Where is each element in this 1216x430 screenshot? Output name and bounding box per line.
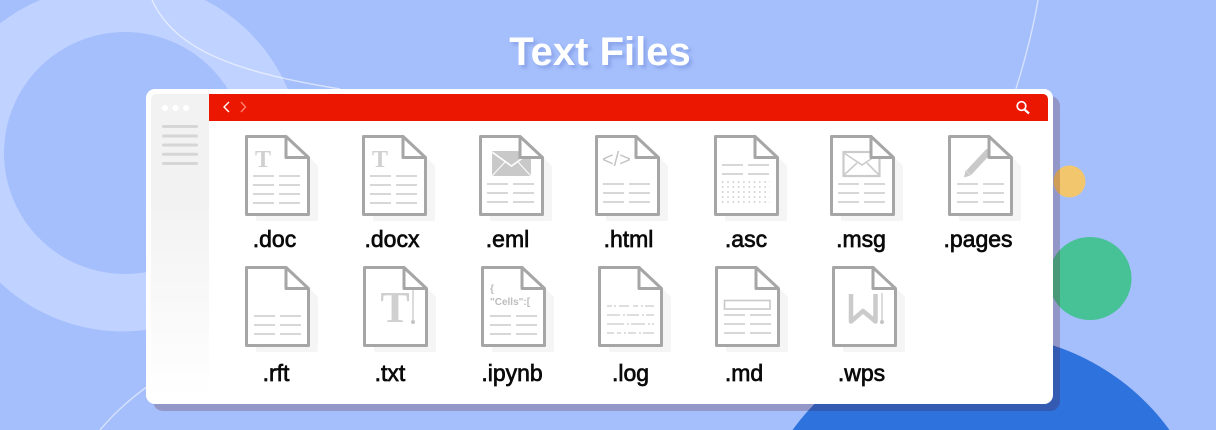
file: .doc: T: [255, 147, 271, 173]
file: .txt: T: [380, 283, 410, 332]
file: .pages: .pages: [943, 226, 1013, 252]
panel shadow: [153, 96, 1060, 411]
file: .eml: .eml: [486, 226, 529, 252]
file: .msg: [832, 136, 903, 252]
file: .html: [596, 136, 668, 252]
file: .ipynb: .ipynb: [481, 360, 543, 386]
file: .html: </>: [602, 149, 631, 171]
icon: search: [1017, 102, 1029, 114]
icon: forward arrow: [241, 102, 246, 112]
decorative yellow circle: [1054, 166, 1086, 198]
icon: back arrow: [224, 102, 229, 112]
file: .rft: .rft: [263, 360, 290, 386]
file: .ipynb: {: [490, 284, 494, 295]
file: .pages: [943, 136, 1021, 252]
file: .md: .md: [725, 360, 763, 386]
file: .docx: .docx: [365, 226, 420, 252]
file: .md: [716, 268, 788, 386]
file: .ipynb: "Cells":[: [490, 297, 531, 308]
title: Text Files: [509, 30, 691, 74]
file: .eml: [480, 136, 552, 252]
file: .docx: [364, 136, 435, 252]
panel: browser window: [146, 89, 1060, 411]
file: .asc: .asc: [725, 226, 767, 252]
decorative curved lines: [100, 0, 1038, 430]
file: .doc: .doc: [253, 226, 296, 252]
decorative large light circle: [0, 0, 302, 331]
file: .doc: [246, 136, 318, 252]
file: .msg: .msg: [836, 226, 886, 252]
file: .docx: T: [372, 147, 388, 173]
sidebar: [151, 94, 209, 399]
file: .txt: .txt: [375, 360, 406, 386]
file: .wps: [834, 268, 905, 386]
file: .wps: .wps: [838, 360, 885, 386]
file: .log: [600, 268, 671, 386]
decorative green circle: [1048, 237, 1132, 320]
file: .log: .log: [612, 360, 649, 386]
panel body: [146, 89, 1053, 404]
file: .rft: [246, 268, 318, 386]
file: .asc: [716, 136, 787, 252]
red toolbar: [209, 94, 1048, 121]
file: .ipynb: [481, 268, 554, 386]
decorative dark blue circle: [792, 334, 1170, 430]
file: .txt: [364, 268, 436, 386]
decorative inner circle: [4, 32, 246, 274]
file: .html: .html: [604, 226, 653, 252]
